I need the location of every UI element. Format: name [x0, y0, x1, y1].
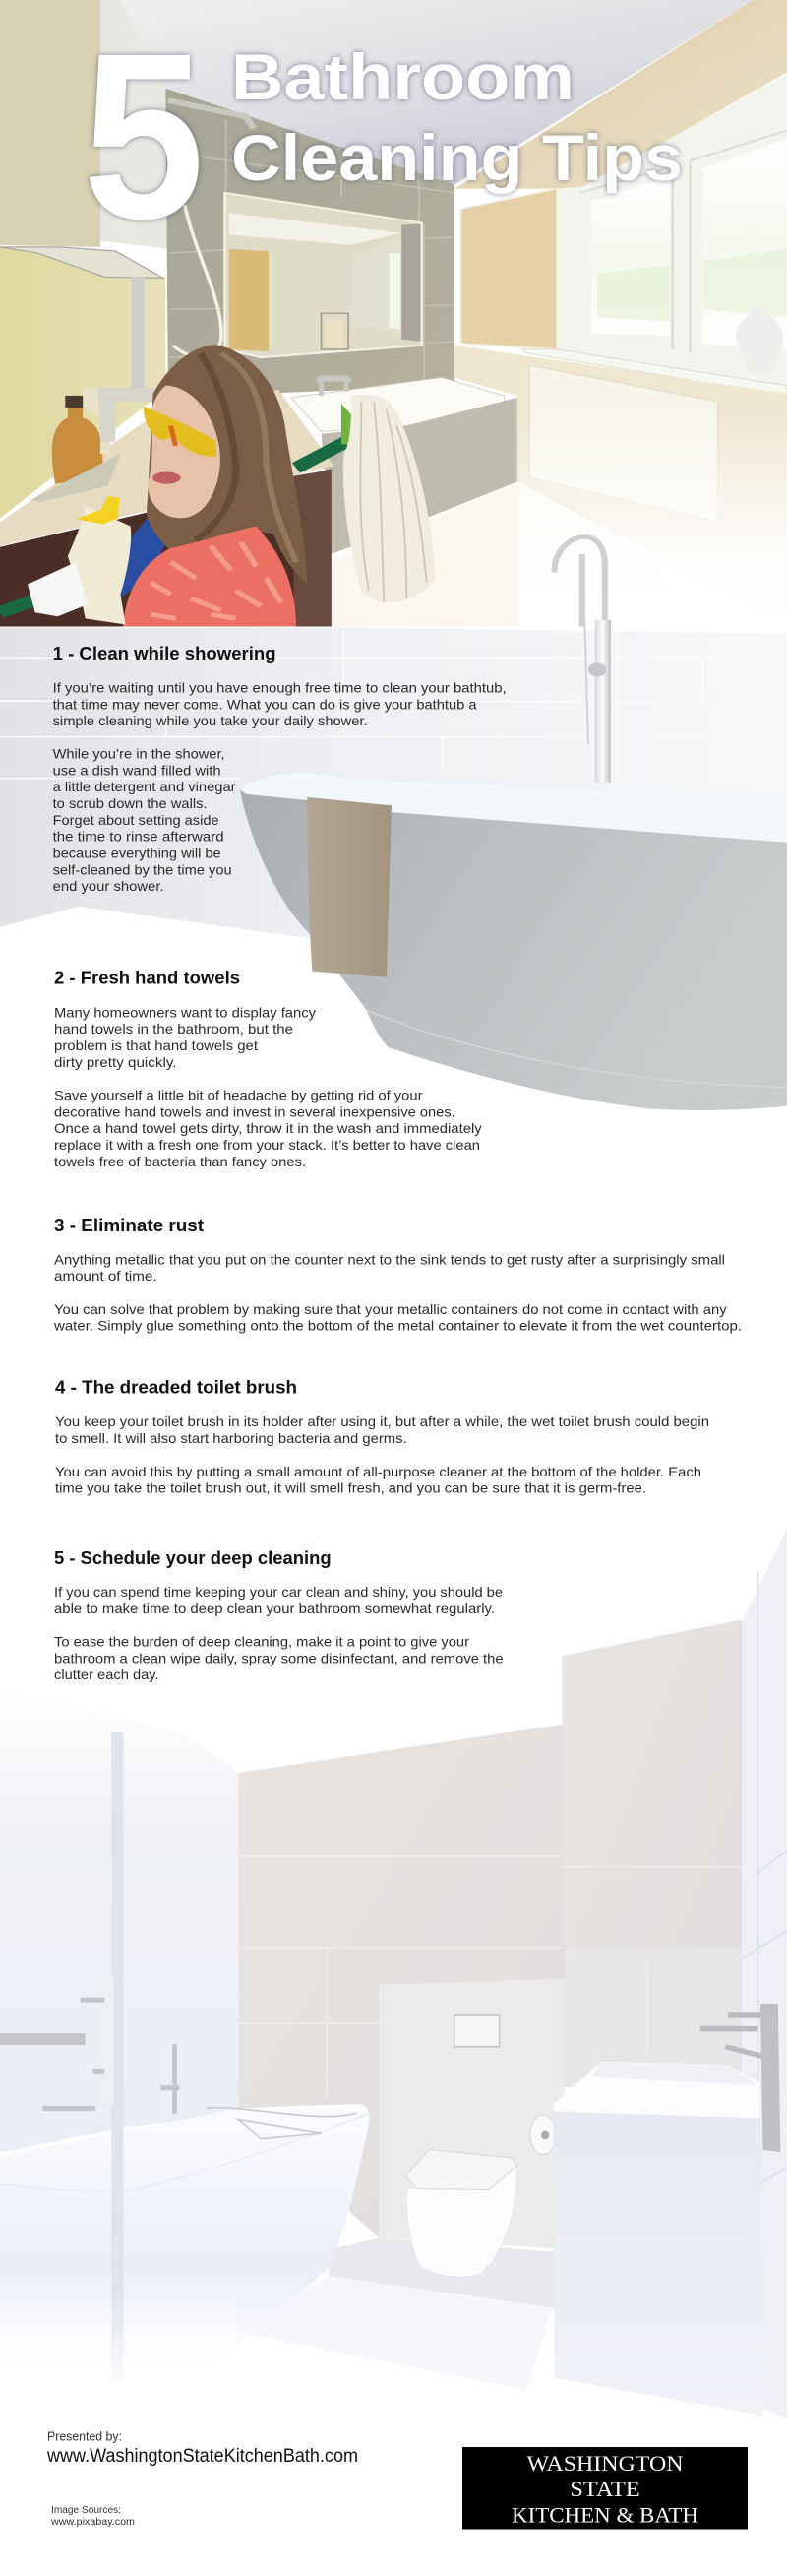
vanity cabinet — [0, 470, 332, 626]
white column — [100, 0, 170, 249]
tip 2 body — [54, 1005, 482, 1169]
left upper wall — [0, 0, 100, 247]
toilet paper — [530, 2115, 556, 2155]
left white wall — [0, 1689, 238, 2152]
tip 2 body: Many homeowners want to display fancy — [54, 1005, 316, 1020]
tip 1 body: Forget about setting aside — [53, 813, 219, 828]
green pole — [0, 442, 346, 612]
tile lines — [238, 1856, 742, 2099]
image sources: Image Sources: — [51, 2505, 121, 2516]
niche — [460, 189, 557, 349]
mirror — [225, 193, 422, 357]
tip 5 body: If you can spend time keeping your car clean and shiny, you should be — [54, 1585, 503, 1600]
door handle — [760, 2004, 780, 2152]
wall shelf — [0, 247, 163, 278]
tip 2 body: problem is that hand towels get — [54, 1038, 258, 1053]
tub inner — [240, 773, 787, 843]
blouse — [123, 526, 296, 626]
image sources — [50, 2505, 135, 2528]
floor — [332, 482, 702, 626]
tile column — [562, 1619, 742, 2082]
tip 1 body: use a dish wand filled with — [53, 763, 221, 778]
toilet — [405, 2150, 517, 2277]
shower hose — [173, 205, 221, 357]
half wall — [379, 1979, 565, 2249]
floor — [329, 2238, 555, 2308]
flush plate — [454, 2015, 500, 2047]
ceiling — [120, 0, 753, 185]
tip 2 body: towels free of bacteria than fancy ones. — [54, 1155, 306, 1169]
tip 5 body — [54, 1585, 504, 1682]
bathtub photo — [0, 620, 787, 1110]
tip 3 body: amount of time. — [54, 1269, 157, 1284]
face — [148, 386, 220, 518]
title line 1: Bathroom — [231, 40, 575, 113]
glove — [68, 506, 131, 624]
tip 1 body: self-cleaned by the time you — [53, 862, 232, 877]
heading: tip 5: 5 - Schedule your deep cleaning — [54, 1547, 332, 1568]
door panel lines — [742, 1571, 787, 2416]
logo: Washington State Kitchen & Bath: KITCHEN & BATH — [512, 2502, 698, 2527]
bathtub — [0, 2104, 370, 2372]
heading: tip 4: 4 - The dreaded toilet brush — [55, 1377, 297, 1398]
bath tap — [316, 378, 351, 396]
bath panel — [322, 398, 517, 554]
tip 1 body: If you’re waiting until you have enough free time to clean your bathtub, — [53, 681, 507, 695]
tip 1 body: the time to rinse afterward — [53, 830, 224, 845]
tip 2 text — [54, 967, 482, 1169]
mop head — [341, 394, 436, 602]
towel bar — [0, 2033, 86, 2045]
tip 3 body — [53, 1252, 742, 1334]
blue cloth — [120, 514, 168, 598]
spray bottle — [28, 562, 88, 616]
tip 2 body: decorative hand towels and invest in several inexpensive ones. — [54, 1104, 455, 1119]
image sources: www.pixabay.com — [50, 2517, 135, 2528]
tip 4 text — [55, 1377, 709, 1496]
tile grid — [170, 120, 454, 382]
tip 4 body — [55, 1414, 709, 1496]
window panes — [579, 131, 787, 353]
tiled wall — [165, 89, 454, 398]
tip 1 body: to scrub down the walls. — [53, 796, 208, 811]
shower head rail — [168, 100, 254, 129]
lips — [152, 471, 181, 484]
bath mixer — [42, 2000, 180, 2114]
tip 2 body: dirty pretty quickly. — [54, 1055, 177, 1070]
header photo: bathroom scene — [0, 0, 787, 626]
tip 2 body: Save yourself a little bit of headache by getting rid of your — [54, 1089, 423, 1103]
tip 1 body: that time may never come. What you can do is give your bathtub a — [53, 697, 477, 712]
faucet column — [584, 620, 611, 783]
vase — [735, 301, 783, 375]
tip 2 body: hand towels in the bathroom, but the — [54, 1022, 293, 1037]
glass edge — [111, 1732, 124, 2383]
tip 2 body: replace it with a fresh one from your stack. It’s better to have clean — [54, 1138, 480, 1153]
shower pipe — [132, 278, 145, 394]
website url: www.WashingtonStateKitchenBath.com — [46, 2446, 358, 2467]
tip 2 body: Once a hand towel gets dirty, throw it in the wash and immediately — [54, 1121, 482, 1136]
tip 1 body: While you’re in the shower, — [53, 746, 225, 762]
safety glasses — [144, 407, 216, 457]
logo: Washington State Kitchen & Bath — [462, 2447, 748, 2530]
counter top — [0, 390, 333, 546]
tip 3 body: water. Simply glue something onto the bottom of the metal container to elevate it from the wet countertop. — [53, 1319, 742, 1334]
title line 2: Cleaning Tips — [231, 121, 683, 194]
bottom bathroom photo — [0, 1528, 787, 2419]
brick lines — [0, 628, 787, 783]
tip 1 body: a little detergent and vinegar — [53, 780, 236, 794]
fade bottom — [0, 2292, 236, 2394]
tip 1 body: because everything will be — [53, 847, 221, 860]
logo: Washington State Kitchen & Bath: STATE — [570, 2477, 640, 2501]
tip 1 body: simple cleaning while you take your daily shower. — [53, 714, 368, 728]
right door wall — [742, 1528, 787, 2419]
lower right wall — [454, 346, 787, 626]
title — [83, 4, 683, 268]
fade to white on lower right — [519, 402, 787, 626]
tip 3 body: You can solve that problem by making sure that your metallic containers do not come in contact with any — [54, 1302, 727, 1317]
tip 1 text — [53, 643, 507, 894]
hair — [147, 345, 307, 585]
vanity — [553, 2062, 763, 2416]
numeral 5: 5 — [83, 4, 205, 268]
tip 1 body — [53, 681, 507, 894]
right wall — [454, 0, 787, 189]
tip 4 body: time you take the toilet brush out, it will smell fresh, and you can be sure that it is germ-free. — [55, 1481, 646, 1496]
tub base ridge — [366, 1010, 787, 1088]
tip 4 body: to smell. It will also start harboring bacteria and germs. — [55, 1431, 407, 1446]
tip 3 body: Anything metallic that you put on the counter next to the sink tends to get rusty after a surprisingly small — [54, 1252, 725, 1267]
bath tray — [206, 2108, 356, 2139]
sink tap — [700, 2015, 768, 2058]
floor tap upper part — [555, 536, 605, 626]
heading: tip 3: 3 - Eliminate rust — [54, 1215, 204, 1235]
heading: tip 2: 2 - Fresh hand towels — [54, 967, 240, 987]
soap bottles — [30, 388, 155, 502]
tip 3 text — [53, 1215, 742, 1334]
woman — [0, 345, 436, 626]
radiator cover — [529, 365, 718, 522]
towel — [307, 797, 392, 977]
tip 5 body: bathroom a clean wipe daily, spray some disinfectant, and remove the — [54, 1652, 504, 1665]
spray nozzle — [76, 496, 119, 524]
right wall window frame area — [557, 74, 787, 386]
back wall — [238, 1725, 565, 2238]
tip 5 body: able to make time to deep clean your bathroom somewhat regularly. — [54, 1602, 495, 1616]
window sill — [522, 349, 787, 396]
bath mat — [238, 2276, 552, 2390]
tip 4 body: You keep your toilet brush in its holder after using it, but after a while, the wet toilet brush could begin — [55, 1414, 709, 1429]
tip 5 body: To ease the burden of deep cleaning, make it a point to give your — [54, 1635, 470, 1650]
bathtub rim — [291, 378, 505, 432]
tub front shading — [0, 2114, 369, 2191]
tub body — [240, 773, 787, 1110]
presented by: Presented by: — [47, 2429, 122, 2443]
left lower wall — [0, 247, 165, 518]
tip 4 body: You can avoid this by putting a small amount of all-purpose cleaner at the bottom of the holder. Each — [55, 1465, 701, 1479]
tiled wall — [0, 628, 787, 997]
tip 5 body: clutter each day. — [54, 1667, 159, 1682]
tip 1 body: end your shower. — [53, 879, 164, 894]
tip 5 text — [54, 1547, 504, 1682]
logo: Washington State Kitchen & Bath: WASHINGTON — [527, 2451, 684, 2476]
heading: tip 1: 1 - Clean while showering — [53, 643, 276, 663]
